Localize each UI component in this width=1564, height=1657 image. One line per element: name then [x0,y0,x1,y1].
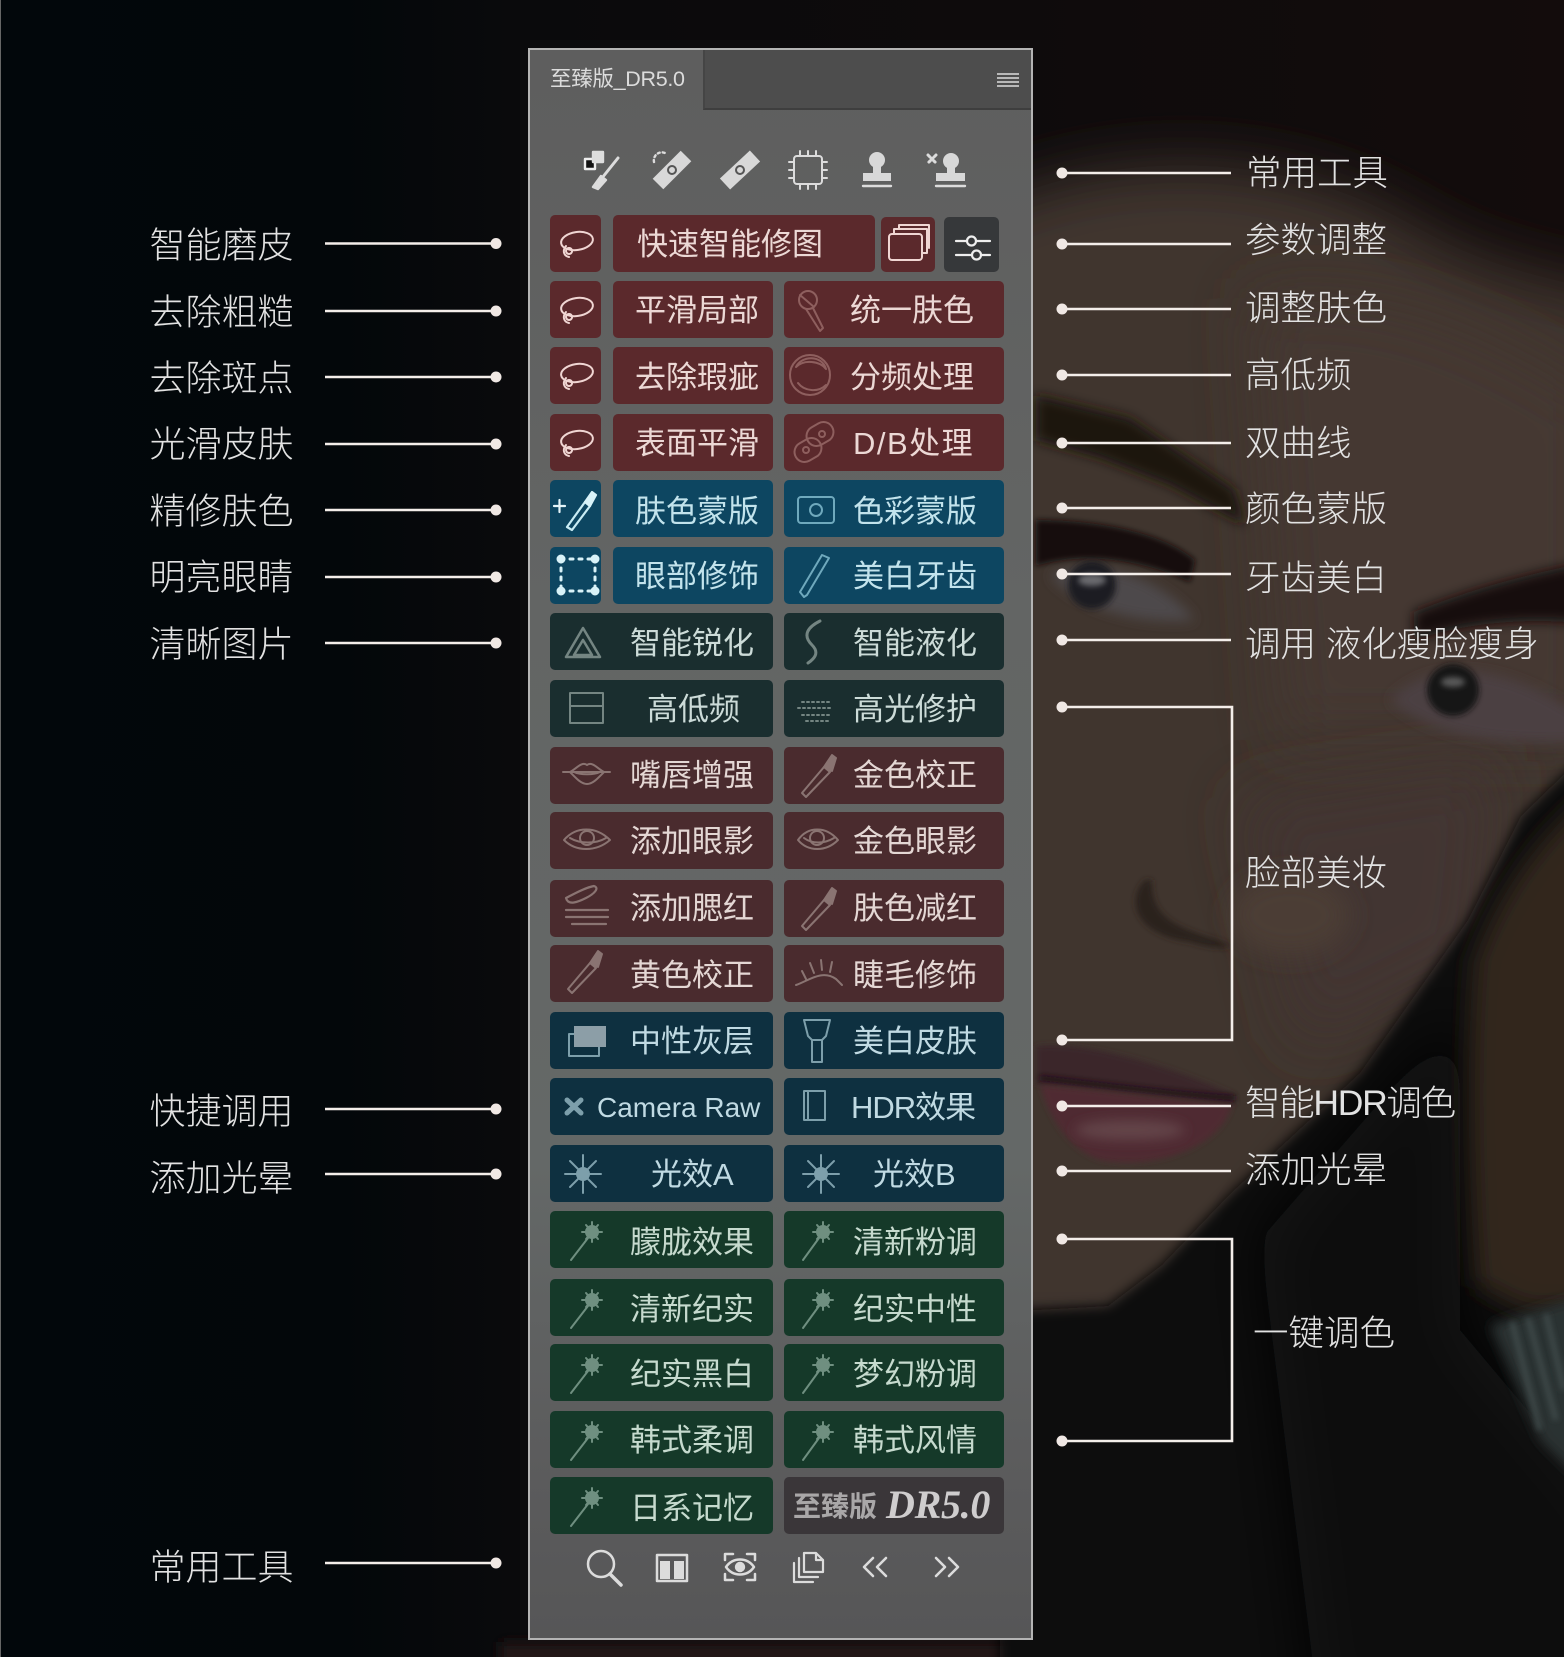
button: dreamy pink [784,1344,1004,1401]
left label: remove roughness: 去除粗糙 [150,292,294,332]
logo: DR5.0 [784,1477,1004,1534]
right label: adjust skin color [1056,288,1387,328]
panel: plugin window [528,48,1033,1640]
button: lip enhance [550,747,773,804]
right label: smart HDR: 智能HDR调色 [1245,1083,1456,1123]
left label: common tools: 常用工具 [150,1546,294,1588]
right label: liquify [1056,624,1539,664]
button: dreamy pink: 梦幻粉调 [853,1357,977,1392]
button: color mask: 色彩蒙版 [853,494,977,529]
icon: next [934,1556,960,1578]
button: fresh documentary: 清新纪实 [630,1292,754,1327]
button: frequency separation [784,347,1004,404]
button rows 7-8: sharpen and liquify [550,613,1004,737]
button: unify skin color: 统一肤色 [850,293,974,328]
button: highlight repair [784,680,1004,737]
button: whiten skin: 美白皮肤 [853,1024,977,1059]
button: lasso [550,215,601,272]
right label: adjust skin color: 调整肤色 [1245,288,1387,328]
button: selection frame [550,547,601,604]
button: gold correction: 金色校正 [853,758,977,793]
left label: remove spots [150,358,502,398]
left label: refine skin color: 精修肤色 [150,490,294,532]
button: reduce skin redness: 肤色减红 [853,891,977,926]
button: smart sharpen [550,613,773,670]
right label: high low frequency [1056,355,1352,395]
button: HDR effect: HDR效果 [851,1090,975,1125]
button rows 5-6: masks and eyes [550,480,1004,604]
tab bar [703,50,1031,110]
icon row: bottom tools [586,1550,960,1587]
left label: brighten eyes: 明亮眼睛 [150,556,294,598]
button: add blush: 添加腮红 [630,891,754,926]
button: smart liquify: 智能液化 [853,626,977,661]
right label: whiten teeth: 牙齿美白 [1245,558,1387,598]
button: parameter sliders [944,217,999,272]
left label: quick call: 快捷调用 [150,1090,294,1132]
hand on right [1469,770,1564,1310]
button: gold correction [784,747,1004,804]
left label: remove roughness [150,292,502,332]
button: layers [881,217,935,272]
left label: smooth skin [150,424,502,464]
button: lip enhance: 嘴唇增强 [630,758,754,793]
logo: DR5.0: 至臻版 [793,1491,877,1522]
button: documentary neutral: 纪实中性 [853,1292,977,1327]
right label: parameter adjust: 参数调整 [1245,220,1387,260]
icon: stamp [862,152,892,188]
button: hazy effect: 朦胧效果 [630,1225,754,1260]
right bracket: face makeup: 脸部美妆 [1245,853,1387,893]
button: hazy effect [550,1211,773,1268]
left label: brighten eyes [150,556,502,598]
logo: DR5.0: DR5.0 [886,1482,990,1527]
button: color mask [784,480,1004,537]
button: fresh pink: 清新粉调 [853,1225,977,1260]
button: Japanese memory: 日系记忆 [630,1491,754,1526]
button: unify skin color [784,281,1004,338]
button: Korean soft [550,1411,773,1468]
right label: color mask: 颜色蒙版 [1245,489,1387,529]
button: dodge and burn: D/B处理 [853,426,974,461]
button: yellow correction [550,945,773,1002]
button: smart liquify [784,613,1004,670]
icon: compare view [656,1554,688,1582]
button: eyelash retouch: 睫毛修饰 [853,958,977,993]
right label: whiten teeth [1056,558,1387,598]
left label: add halo [150,1158,502,1198]
button: fresh documentary [550,1279,773,1336]
icon: brush tool [584,150,620,190]
button: whiten teeth: 美白牙齿 [853,559,977,594]
button: eyelash retouch [784,945,1004,1002]
button: smooth surface: 表面平滑 [635,426,759,461]
button: camera raw [550,1078,773,1135]
button: frequency separation: 分频处理 [850,360,974,395]
button: smooth local [613,281,773,338]
button: reduce skin redness [784,880,1004,937]
icon row: top tools [584,150,966,190]
right label: color mask [1056,489,1387,529]
button: eye retouch: 眼部修饰 [635,559,759,594]
button rows 16-20: one-click color grading [550,1211,1004,1534]
button: eye retouch [613,547,773,604]
right bracket: one-click color grading [1056,1234,1395,1446]
button rows 9-12: makeup [550,747,1004,1002]
button: gold eyeshadow [784,812,1004,869]
right label: double curves [1056,423,1352,463]
left label: smart skin smoothing: 智能磨皮 [150,224,294,266]
button: quick smart retouch: 快速智能修图 [637,227,823,262]
button: documentary black and white: 纪实黑白 [630,1357,754,1392]
button rows 13-15: shortcuts [550,1012,1004,1202]
button: smooth local: 平滑局部 [635,293,759,328]
button: neutral gray layer: 中性灰层 [630,1024,754,1059]
button: yellow correction: 黄色校正 [630,958,754,993]
icon: panel menu [997,73,1019,87]
button: Japanese memory [550,1477,773,1534]
left label: refine skin color [150,490,502,532]
right label: add halo [1056,1150,1387,1190]
icon: previous [862,1556,888,1578]
button: add blush [550,880,773,937]
right label: common tools: 常用工具 [1246,153,1388,193]
right label: smart HDR [1056,1083,1456,1123]
icon: copy layers [792,1552,824,1584]
button: skin mask [613,480,773,537]
button: Korean style: 韩式风情 [853,1423,977,1458]
button: highlight repair: 高光修护 [853,692,977,727]
button: light effect A: 光效A [651,1157,734,1192]
button: add eyeshadow [550,812,773,869]
button: dodge and burn [784,414,1004,471]
button: fresh pink [784,1211,1004,1268]
eyebrow, eyes, nose and lips [1036,395,1564,1163]
right label: high low frequency: 高低频 [1245,355,1352,395]
button: camera raw: Camera Raw [597,1092,760,1123]
right label: parameter adjust [1056,220,1387,260]
button: gold eyeshadow: 金色眼影 [853,824,977,859]
button: high low frequency: 高低频 [647,692,740,727]
left label: add halo: 添加光晕 [150,1158,294,1198]
right bracket: face makeup [1056,702,1387,1046]
button: remove blemish: 去除瑕疵 [635,360,759,395]
button: skin mask: 肤色蒙版 [635,494,759,529]
button: lasso [550,281,601,338]
right label: common tools [1056,153,1388,193]
icon: zoom [586,1550,623,1587]
button: Korean soft: 韩式柔调 [630,1423,754,1458]
left label: common tools [150,1546,502,1588]
icon: patch tool [788,150,828,190]
icon: eye preview [724,1552,756,1582]
button: eyedropper plus [550,480,601,537]
button: documentary neutral [784,1279,1004,1336]
icon: healing bandage [720,150,760,190]
button: lasso [550,347,601,404]
left label: sharpen image [150,624,502,664]
right label: double curves: 双曲线 [1245,423,1352,463]
button: light effect A [550,1145,773,1202]
button: HDR effect [784,1078,1004,1135]
left label: remove spots: 去除斑点 [150,358,294,398]
button: light effect B [784,1145,1004,1202]
button: add eyeshadow: 添加眼影 [630,824,754,859]
button rows 2-4: skin smoothing [550,281,1004,471]
button: smart sharpen: 智能锐化 [630,626,754,661]
left label: sharpen image: 清晰图片 [150,624,294,664]
button: lasso [550,414,601,471]
button: documentary black and white [550,1344,773,1401]
button: whiten skin [784,1012,1004,1069]
button: whiten teeth [784,547,1004,604]
right label: liquify: 调用 液化瘦脸瘦身 [1245,624,1539,664]
button: light effect B: 光效B [873,1157,956,1192]
button: smooth surface [613,414,773,471]
button: Korean style [784,1411,1004,1468]
left label: smooth skin: 光滑皮肤 [150,424,294,464]
icon: pattern stamp [926,153,966,188]
left label: quick call [150,1090,502,1132]
skin tone, soft everywhere [960,165,1564,1350]
dark area under jaw [1000,720,1564,1657]
right label: add halo: 添加光晕 [1245,1150,1387,1190]
right bracket: one-click color grading: 一键调色 [1253,1313,1395,1353]
left label: smart skin smoothing [150,224,502,266]
button: remove blemish [613,347,773,404]
button: high low frequency [550,680,773,737]
tab title: 至臻版_DR5.0 [550,67,685,91]
button row 1: quick smart retouch [550,215,999,272]
button: quick smart retouch [613,215,875,272]
icon: selection healing [652,150,692,190]
button: neutral gray layer [550,1012,773,1069]
